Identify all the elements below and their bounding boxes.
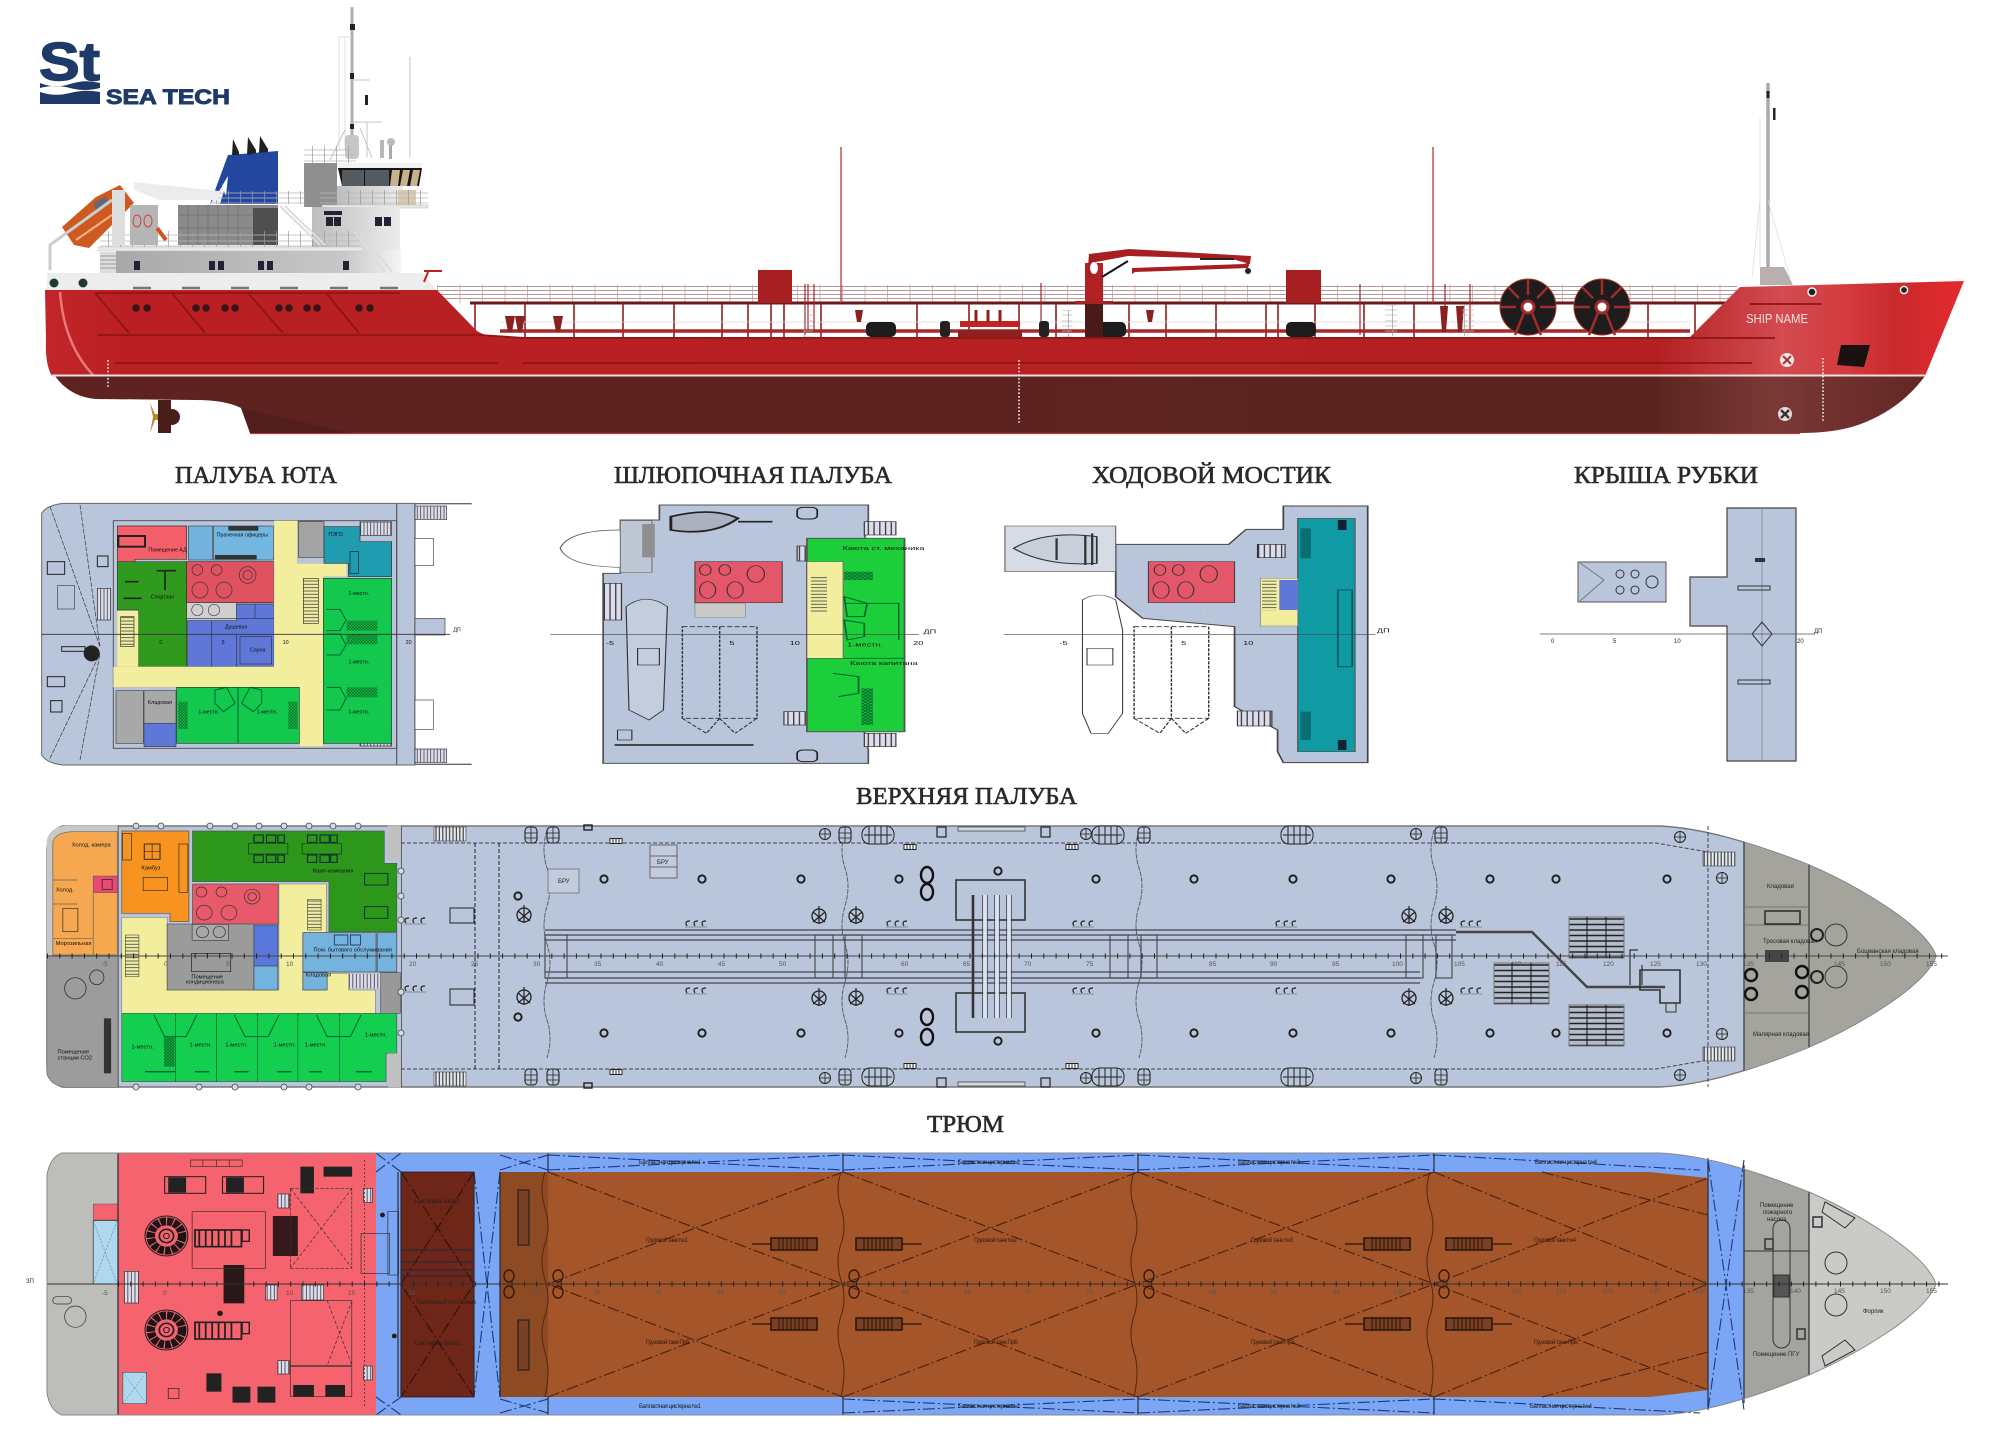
room: engine casing	[187, 562, 274, 603]
hold centerline: -5	[102, 1290, 108, 1297]
centerline and frame numbers: 90	[1270, 961, 1278, 968]
centerline: 5	[222, 640, 225, 646]
CO2 room: станции СО2	[57, 1055, 92, 1061]
upper bridge structure	[304, 146, 428, 208]
lifeboat and davit	[50, 182, 219, 270]
centerline and frame numbers: 100	[1392, 961, 1403, 968]
stair yellow and wc	[1260, 578, 1298, 626]
panel: hold plan	[26, 1150, 1948, 1420]
room: cabins bottom: 1-местн.	[257, 709, 278, 715]
stern light orange stores: Морозильная	[56, 941, 91, 947]
hull details	[52, 286, 1925, 434]
mess room	[192, 831, 397, 932]
hold centerline: 40	[655, 1289, 663, 1296]
tank labels: Грузовой танк ПрБ	[974, 1339, 1018, 1346]
centerline: -5	[606, 640, 614, 646]
tank labels: Балластная цистерна №2	[958, 1403, 1021, 1410]
tank labels: Грузовой танк ПрБ	[1534, 1339, 1578, 1346]
room: sauna and showers: Сауна	[250, 648, 265, 654]
centerline and frame numbers: 35	[594, 961, 602, 968]
hold hull outline	[47, 1153, 1936, 1415]
roof centerline: 5	[1613, 639, 1617, 645]
galley	[122, 831, 189, 922]
engine room details	[53, 1160, 399, 1407]
roof small casing	[1578, 562, 1666, 602]
hold centerline: 50	[778, 1289, 786, 1296]
centerline and frame numbers: 130	[1696, 961, 1707, 968]
centerline and frame numbers: 20	[409, 961, 417, 968]
tank labels	[415, 1159, 1884, 1410]
deck hull	[47, 826, 1936, 1087]
room: tanks gray	[187, 603, 237, 618]
roof centerline: ДП	[1814, 629, 1822, 635]
centerline	[42, 628, 461, 646]
fore pump room details	[1744, 1202, 1855, 1366]
cabins: 1-местн.	[190, 1043, 212, 1049]
hold centerline: 115	[1556, 1288, 1567, 1295]
tank cross bracing	[376, 1153, 1744, 1415]
room: cabins right	[323, 578, 392, 743]
room: sauna and showers: Душевая	[225, 624, 247, 630]
centerline	[1004, 628, 1390, 646]
rooms: laundry and store	[188, 526, 273, 560]
bridge teal	[1298, 518, 1355, 752]
centerline and frame numbers: 120	[1603, 961, 1614, 968]
centerline: 20	[406, 640, 412, 646]
tank labels: Помещение ПГУ	[1753, 1352, 1800, 1358]
logo letters St: St	[39, 32, 100, 92]
hold centerline: 85	[1209, 1289, 1217, 1296]
fore pump rooms	[1744, 1170, 1808, 1398]
centerline and frame numbers: 95	[1332, 961, 1340, 968]
logo waves	[40, 81, 100, 104]
tank labels: Цистерна запас.	[415, 1341, 461, 1347]
container / machinery on boat deck	[178, 191, 305, 245]
stern light orange stores: Холод.	[56, 888, 74, 894]
room: cabins right: 1-местн.	[348, 659, 369, 665]
rooms: laundry and store: Прачечная офицеры	[217, 533, 268, 539]
tank labels: Помещение	[1760, 1203, 1794, 1209]
title: hold: ТРЮМ	[927, 1112, 1004, 1138]
cabins: 1-местн.	[305, 1043, 327, 1049]
centerline and frame numbers: 115	[1556, 961, 1567, 968]
roof centerline: 0	[1551, 639, 1555, 645]
roof centerline: 10	[1674, 639, 1681, 645]
tank labels: Балластная цистерна №3	[1238, 1403, 1301, 1410]
hold centerline: ЗП	[26, 1279, 34, 1285]
hull red topside	[45, 281, 1964, 376]
centerline and frame numbers: 85	[1209, 961, 1217, 968]
aft mast	[330, 7, 410, 160]
shaft recess	[53, 1204, 146, 1404]
hose reels	[1500, 279, 1630, 335]
cabins: 1-местн.	[274, 1043, 296, 1049]
roof centerline	[1540, 629, 1822, 645]
tank labels: Балластная цистерна №1	[639, 1159, 702, 1166]
underwater hull	[52, 376, 1925, 433]
engine casing	[192, 884, 278, 924]
centerline and frame numbers: 70	[1024, 961, 1032, 968]
room: wc	[144, 723, 176, 747]
centerline and frame numbers: 0	[164, 961, 168, 968]
tank labels: пожарного	[1763, 1210, 1793, 1216]
logo: Sea Tech	[39, 32, 230, 109]
hold centerline: 145	[1834, 1288, 1845, 1295]
tank labels: Балластная цистерна №2	[958, 1159, 1021, 1166]
room: cabins bottom: 1-местн.	[198, 709, 219, 715]
room: cabins right: 1-местн.	[348, 591, 369, 597]
centerline and frame numbers: 40	[656, 961, 664, 968]
corridor yellow	[122, 884, 375, 1013]
hold centerline: 10	[286, 1290, 294, 1297]
room: gym	[117, 562, 187, 667]
engine casing red	[1148, 562, 1235, 603]
hose grilles and fore equipment	[1494, 917, 1680, 1046]
hold centerline: 135	[1743, 1288, 1754, 1295]
centerline: 0	[159, 640, 162, 646]
hold centerline	[26, 1279, 1948, 1297]
tank labels: Грузовой танк №4	[1534, 1237, 1577, 1244]
title: boat deck: ШЛЮПОЧНАЯ ПАЛУБА	[614, 463, 893, 489]
stern bulwark	[47, 271, 442, 290]
centerline and frame numbers: 155	[1926, 961, 1937, 968]
hold centerline: 0	[163, 1290, 167, 1297]
deck railing and catwalk	[437, 283, 1745, 337]
vertical bulkheads and engine-room cargo pipes	[118, 1153, 1809, 1415]
room: emergency generator: Помещение АД	[148, 548, 187, 554]
centerline and frame numbers: 50	[779, 961, 787, 968]
rudder and propeller	[150, 400, 350, 433]
forepeak	[1810, 1193, 1936, 1374]
deck vents and hydrants	[404, 867, 1671, 1045]
galley: Камбуз	[141, 865, 161, 871]
panel: boat deck plan	[550, 505, 936, 763]
wc and stores	[254, 925, 397, 990]
centerline: 10	[283, 640, 289, 646]
hold centerline: 95	[1333, 1289, 1341, 1296]
centerline	[550, 628, 936, 646]
hold centerline: 30	[533, 1290, 541, 1297]
cabins	[122, 1013, 397, 1082]
deck outline	[1005, 506, 1368, 763]
tanks gray	[695, 603, 745, 617]
room: cabins right: 1-местн.	[348, 709, 369, 715]
forecastle	[1743, 842, 1936, 1071]
wc and stores: Пом. бытового обслуживания	[314, 948, 392, 954]
centerline and frame numbers: 60	[901, 961, 909, 968]
hull details: SHIP NAME	[1746, 311, 1808, 326]
crane	[1075, 249, 1251, 337]
tank labels: Форпик	[1863, 1309, 1884, 1315]
deck masts	[841, 147, 1433, 303]
hold centerline: 140	[1790, 1288, 1801, 1295]
tank labels: Грузовой танк ПрБ	[646, 1339, 690, 1346]
hold centerline: 155	[1926, 1288, 1937, 1295]
corridor	[113, 521, 347, 747]
hold centerline: 100	[1393, 1289, 1404, 1296]
hold centerline: 20	[408, 1290, 416, 1297]
hold centerline: 110	[1511, 1288, 1522, 1295]
cabins green	[807, 538, 926, 732]
tank labels: Цистерна запас.	[415, 1199, 461, 1205]
deckhouse with windows	[98, 206, 401, 273]
mess room: Кают-компания	[313, 869, 353, 875]
centerline and frame numbers: 30	[533, 961, 541, 968]
deepwell pumps	[504, 1190, 1512, 1370]
stern rooms	[47, 826, 401, 1087]
slop / fuel tank dark brown	[401, 1172, 474, 1397]
room: stores	[116, 522, 324, 743]
deck hatches: БРУ	[657, 860, 669, 866]
tank labels: Балластная цистерна №3	[1238, 1159, 1301, 1166]
tank labels: Грузовой танк №3	[1251, 1237, 1294, 1244]
title: poop deck: ПАЛУБА ЮТА	[175, 463, 338, 489]
panel: navigation bridge plan	[1004, 506, 1390, 763]
centerline and frame numbers: 135	[1743, 961, 1754, 968]
hold centerline: 75	[1086, 1289, 1094, 1296]
pink room outlines	[124, 1160, 399, 1407]
stern light orange stores	[47, 826, 118, 957]
centerline and frame numbers: 75	[1086, 961, 1094, 968]
centerline and frame numbers: 45	[718, 961, 726, 968]
deck outline	[42, 503, 472, 765]
aft stair and store	[349, 973, 400, 1013]
forward mast	[1752, 83, 1793, 285]
hold centerline: 60	[902, 1289, 910, 1296]
panel: poop deck plan	[42, 503, 472, 765]
tank labels: Грузовой танк №2	[974, 1237, 1018, 1244]
centerline: -5	[1059, 640, 1068, 646]
deck hatches	[450, 825, 1728, 1088]
deck tanks	[758, 270, 1321, 337]
cargo pipes and manifold	[545, 880, 1665, 1032]
centerline: 5	[1181, 640, 1186, 646]
title: wheelhouse roof: КРЫША РУБКИ	[1574, 463, 1758, 489]
logo wordmark: SEA TECH	[106, 86, 230, 109]
centerline and frame numbers: 105	[1454, 961, 1465, 968]
hold centerline: 65	[964, 1289, 972, 1296]
panel: upper deck plan	[47, 820, 1948, 1100]
centerline and frame numbers: 10	[286, 961, 294, 968]
centerline and frame numbers	[47, 956, 1948, 968]
cabins green: Каюта капитана	[850, 660, 919, 666]
tank labels: Балластная цистерна №4	[1530, 1403, 1593, 1410]
forecastle: Тросовая кладовая	[1763, 939, 1817, 945]
tank labels: насоса	[1767, 1217, 1787, 1223]
hull base with tanks	[40, 1150, 1944, 1420]
hold centerline: 70	[1024, 1289, 1032, 1296]
double hull ballast blue	[376, 1150, 1744, 1420]
centerline: ДП	[1377, 628, 1390, 634]
centerline and frame numbers: 5	[226, 961, 230, 968]
tank labels: Грузовой танк №1	[646, 1237, 689, 1244]
roof T plate	[1690, 508, 1796, 761]
ship side elevation	[45, 7, 1964, 434]
aft cargo strip darker	[500, 1172, 548, 1397]
centerline: ДП	[453, 628, 461, 634]
room: cabins bottom	[177, 687, 299, 743]
forecastle: Кладовая	[1767, 884, 1794, 890]
refrigerated red	[93, 876, 117, 893]
CO2 room	[47, 956, 118, 1087]
stern gray	[48, 1154, 118, 1414]
side strips	[118, 826, 401, 1087]
room: stores: Кладовая	[148, 700, 172, 706]
centerline: 5	[729, 640, 735, 646]
CO2 room: Помещение	[57, 1049, 89, 1055]
room: ship office teal: ПЭГО	[328, 532, 343, 538]
title: upper deck: ВЕРХНЯЯ ПАЛУБА	[856, 784, 1078, 810]
centerline and frame numbers: 150	[1880, 961, 1891, 968]
tank labels: Топливный отстойник	[416, 1299, 476, 1306]
room: ship office teal	[324, 527, 392, 577]
funnel	[210, 136, 278, 204]
tank labels: Грузовой танк ПрБ	[1251, 1339, 1295, 1346]
hold centerline: 120	[1603, 1288, 1614, 1295]
air conditioning room	[167, 924, 254, 990]
hold centerline: 15	[348, 1290, 356, 1297]
hold centerline: 90	[1271, 1289, 1279, 1296]
centerline and frame numbers: 145	[1834, 961, 1845, 968]
cabins green: Каюта ст. механика	[842, 545, 926, 551]
centerline and frame numbers: 125	[1650, 961, 1661, 968]
corridor yellow	[807, 562, 843, 658]
cabins: 1-местн.	[131, 1044, 154, 1050]
machinery	[165, 1167, 397, 1403]
deck outline	[560, 505, 904, 763]
hold centerline: 45	[717, 1289, 725, 1296]
forecastle: Малярная кладовая	[1753, 1032, 1809, 1038]
cabins: 1-местн.	[225, 1043, 248, 1049]
centerline: ДП	[923, 628, 936, 635]
room: emergency generator	[117, 526, 187, 568]
centerline and frame numbers: 65	[963, 961, 971, 968]
wc and stores: Кладовая	[306, 973, 331, 979]
cabins green: 1-местн.	[847, 642, 883, 648]
main engines	[145, 1216, 249, 1350]
tank labels: Балластная цистерна №1	[639, 1403, 702, 1410]
centerline and frame numbers: 25	[471, 961, 479, 968]
title: navigation bridge: ХОДОВОЙ МОСТИК	[1092, 463, 1332, 489]
hold centerline: 130	[1695, 1288, 1706, 1295]
centerline: 10	[1243, 640, 1253, 646]
roof centerline: 20	[1797, 639, 1804, 645]
forecastle: Боцманская кладовая	[1857, 949, 1919, 955]
room: sauna and showers	[188, 604, 274, 667]
stern light orange stores: Холод. камера	[72, 843, 112, 849]
centerline and frame numbers: 110	[1511, 961, 1522, 968]
centerline: 20	[913, 640, 923, 646]
room: gym: Спортзал	[151, 594, 174, 600]
centerline: 10	[790, 640, 800, 646]
deck hatches: БРУ	[558, 879, 570, 885]
tank labels: Балластная цистерна №4	[1535, 1159, 1598, 1166]
hold centerline: 150	[1880, 1288, 1891, 1295]
side scuppers along accommodation	[133, 823, 404, 1090]
engine room pink	[118, 1150, 376, 1420]
hold centerline: 125	[1649, 1288, 1660, 1295]
panel: wheelhouse roof plan	[1540, 508, 1822, 761]
deck side ladders and dashed lines	[401, 826, 1735, 1087]
cargo tanks brown	[500, 1172, 1708, 1397]
engine casing red	[695, 562, 782, 603]
centerline and frame numbers: -5	[102, 961, 108, 968]
air conditioning room: Помещение	[191, 974, 223, 980]
air conditioning room: кондиционера	[186, 979, 225, 985]
cabins: 1-местн.	[365, 1033, 387, 1039]
hold centerline: 35	[593, 1289, 601, 1296]
